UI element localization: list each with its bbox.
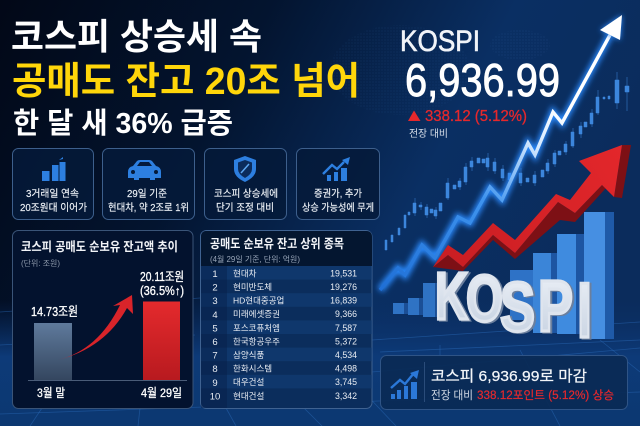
values <box>31 270 184 400</box>
table rows: 6 <box>212 337 218 348</box>
KOSPI headline figures: 338.12 (5.12%) <box>425 108 527 125</box>
lettering shadow: K <box>437 260 470 335</box>
table rows: 1 <box>212 269 218 280</box>
lettering face: P <box>538 267 573 347</box>
table note: (4월 29일 기준, 단위: 억원) <box>210 254 300 264</box>
card: hedge <box>204 148 286 220</box>
card: Hyundai Motor: 현대차, 약 2조로 1위 <box>108 201 189 214</box>
table rows: 대우건설 <box>233 377 264 387</box>
table rows: 19,531 <box>330 268 357 278</box>
values: 14.73조원 <box>31 304 78 319</box>
panel: top short positions table <box>200 230 372 408</box>
icon: shield <box>234 156 256 182</box>
values: (36.5%↑) <box>140 284 184 298</box>
table title: 공매도 순보유 잔고 상위 종목 <box>210 236 344 251</box>
lettering shadow <box>437 260 594 355</box>
card: Hyundai Motor: 29일 기준 <box>127 188 167 200</box>
panel: closing summary <box>380 356 628 410</box>
rising arrow <box>58 295 133 360</box>
KOSPI headline figures: 전장 대비 <box>409 128 448 140</box>
table rows: 현대차 <box>233 268 257 278</box>
card: brokerages <box>296 148 380 220</box>
unit note: (단위: 조원) <box>21 258 60 268</box>
title: 코스피 상승세 속 <box>11 16 262 57</box>
icon: trend <box>323 157 350 181</box>
table rows: 10 <box>210 391 220 402</box>
lettering face: K <box>435 259 468 334</box>
table rows: HD현대중공업 <box>233 296 284 306</box>
table rows: 한화시스템 <box>233 364 272 374</box>
card: hedge: 단기 조정 대비 <box>216 202 274 214</box>
title: 공매도 잔고 20조 넘어 <box>12 61 360 103</box>
lettering face: O <box>466 261 503 335</box>
bar: April 29 <box>143 302 180 380</box>
title: 한 달 새 36% 급증 <box>13 107 233 140</box>
title <box>11 16 360 140</box>
table rows: 3,745 <box>335 377 357 387</box>
table rows: 현미반도체 <box>233 282 272 292</box>
table rows: 5 <box>212 323 218 334</box>
KOSPI headline figures: 6,936.99 <box>405 54 560 106</box>
card: 3 trading days <box>12 148 94 220</box>
lettering face <box>435 259 592 354</box>
table rows: 8 <box>212 364 218 375</box>
bar: March end <box>34 323 72 380</box>
rows shading <box>201 266 372 388</box>
card: brokerages: 증권가, 추가 <box>314 188 362 200</box>
card: 3 trading days: 20조원대 이어가 <box>20 202 87 214</box>
card: brokerages: 상승 가능성에 무게 <box>302 202 374 214</box>
values: 20.11조원 <box>140 270 184 284</box>
table rows: 현대건설 <box>233 391 264 401</box>
lettering shadow: I <box>579 267 594 355</box>
lettering face: I <box>577 266 592 354</box>
values: 4월 29일 <box>141 386 182 400</box>
table rows: 19,276 <box>330 282 357 292</box>
icon: car <box>128 160 161 180</box>
table rows: 7,587 <box>335 323 357 333</box>
table rows: 7 <box>212 351 218 362</box>
icon: trend <box>391 370 419 399</box>
table rows: 5,372 <box>335 336 357 346</box>
lettering shadow: P <box>540 268 575 348</box>
summary text: 코스피 6,936.99로 마감 <box>431 368 587 385</box>
lettering face: S <box>500 268 535 346</box>
candlestick chart <box>385 72 629 250</box>
3D red arrow <box>433 145 631 271</box>
KOSPI 3D lettering <box>435 259 594 355</box>
table rows: 한국항공우주 <box>233 336 280 346</box>
table rows: 포스코퓨처엠 <box>233 323 280 333</box>
table rows: 3 <box>212 296 218 307</box>
lettering shadow: S <box>502 269 537 347</box>
table rows: 2 <box>212 283 218 294</box>
table rows: 4 <box>212 310 218 321</box>
table rows: 9 <box>212 378 218 389</box>
table rows: 4,534 <box>335 350 357 360</box>
panel: closing summary: 전장 대비 <box>431 389 473 402</box>
lettering shadow: O <box>468 262 505 336</box>
icon: bars <box>42 157 66 181</box>
table rows: 삼양식품 <box>233 350 264 360</box>
table rows <box>210 268 357 402</box>
table rows: 미래에셋증권 <box>233 309 280 319</box>
blue trend arrow <box>380 15 622 290</box>
KOSPI headline figures: KOSPI <box>400 25 480 58</box>
table rows: 4,498 <box>335 364 357 374</box>
values: 3월 말 <box>37 386 65 400</box>
table rows: 16,839 <box>330 296 357 306</box>
table rows: 3,342 <box>335 391 357 401</box>
panel: closing summary: 338.12포인트 (5.12%) 상승 <box>477 389 614 402</box>
card: hedge: 코스피 상승세에 <box>214 188 278 200</box>
card: 3 trading days: 3거래일 연속 <box>26 188 79 200</box>
panel: short balance bar chart <box>12 230 193 408</box>
table rows: 9,366 <box>335 309 357 319</box>
3D blue bars <box>393 212 614 339</box>
card: Hyundai Motor <box>102 148 194 220</box>
chart title: 코스피 공매도 순보유 잔고액 추이 <box>21 239 178 254</box>
KOSPI headline figures <box>400 25 560 140</box>
